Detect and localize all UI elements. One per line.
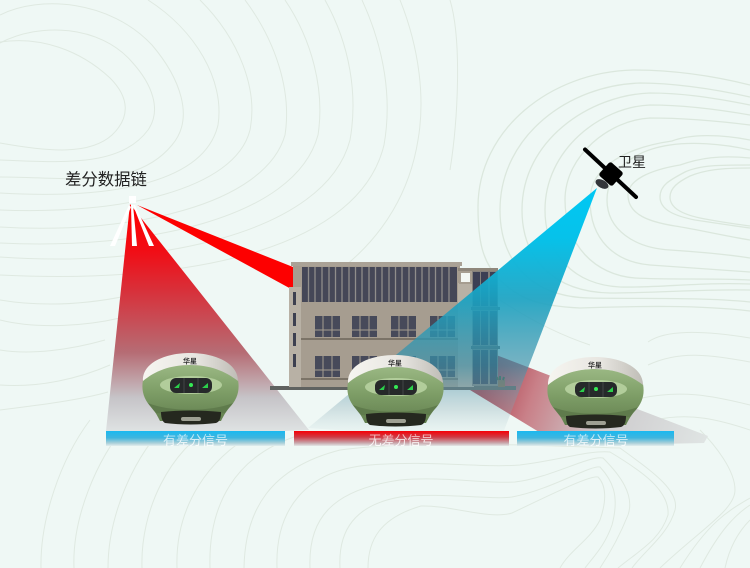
receiver: right: 华星 xyxy=(588,360,602,370)
potted plant xyxy=(497,376,505,387)
receiver: center xyxy=(347,355,444,426)
middle floor windows xyxy=(315,316,455,377)
roof parapet xyxy=(291,262,462,266)
beam gaps: white stripes xyxy=(110,196,154,246)
blue satellite beam xyxy=(308,188,597,441)
status bar: right, has differential signal xyxy=(517,431,674,448)
receiver: left xyxy=(142,353,239,424)
title: differential data link: 差分数据链 xyxy=(65,171,147,189)
status bar: center, no differential signal: 无差分信号 xyxy=(368,433,434,448)
status bar: right, has differential signal: 有差分信号 xyxy=(563,433,629,448)
top floor curtain window xyxy=(302,267,457,302)
receiver: left: 华星 xyxy=(183,356,197,366)
receiver: center: 华星 xyxy=(388,358,402,368)
status bar: center, no differential signal xyxy=(294,431,509,448)
red beam blocked by building xyxy=(137,205,293,290)
left stone column xyxy=(289,287,301,387)
label: satellite: 卫星 xyxy=(618,154,646,170)
red differential beam to left receiver xyxy=(106,204,309,431)
status bar: left, has differential signal xyxy=(106,431,285,448)
status bar: left, has differential signal: 有差分信号 xyxy=(163,433,228,448)
building xyxy=(270,262,516,390)
building main wall xyxy=(293,265,460,387)
receiver: right xyxy=(547,357,644,428)
red signal shadow behind building xyxy=(470,345,708,446)
icon: satellite xyxy=(585,150,636,197)
right stair tower xyxy=(458,268,500,387)
